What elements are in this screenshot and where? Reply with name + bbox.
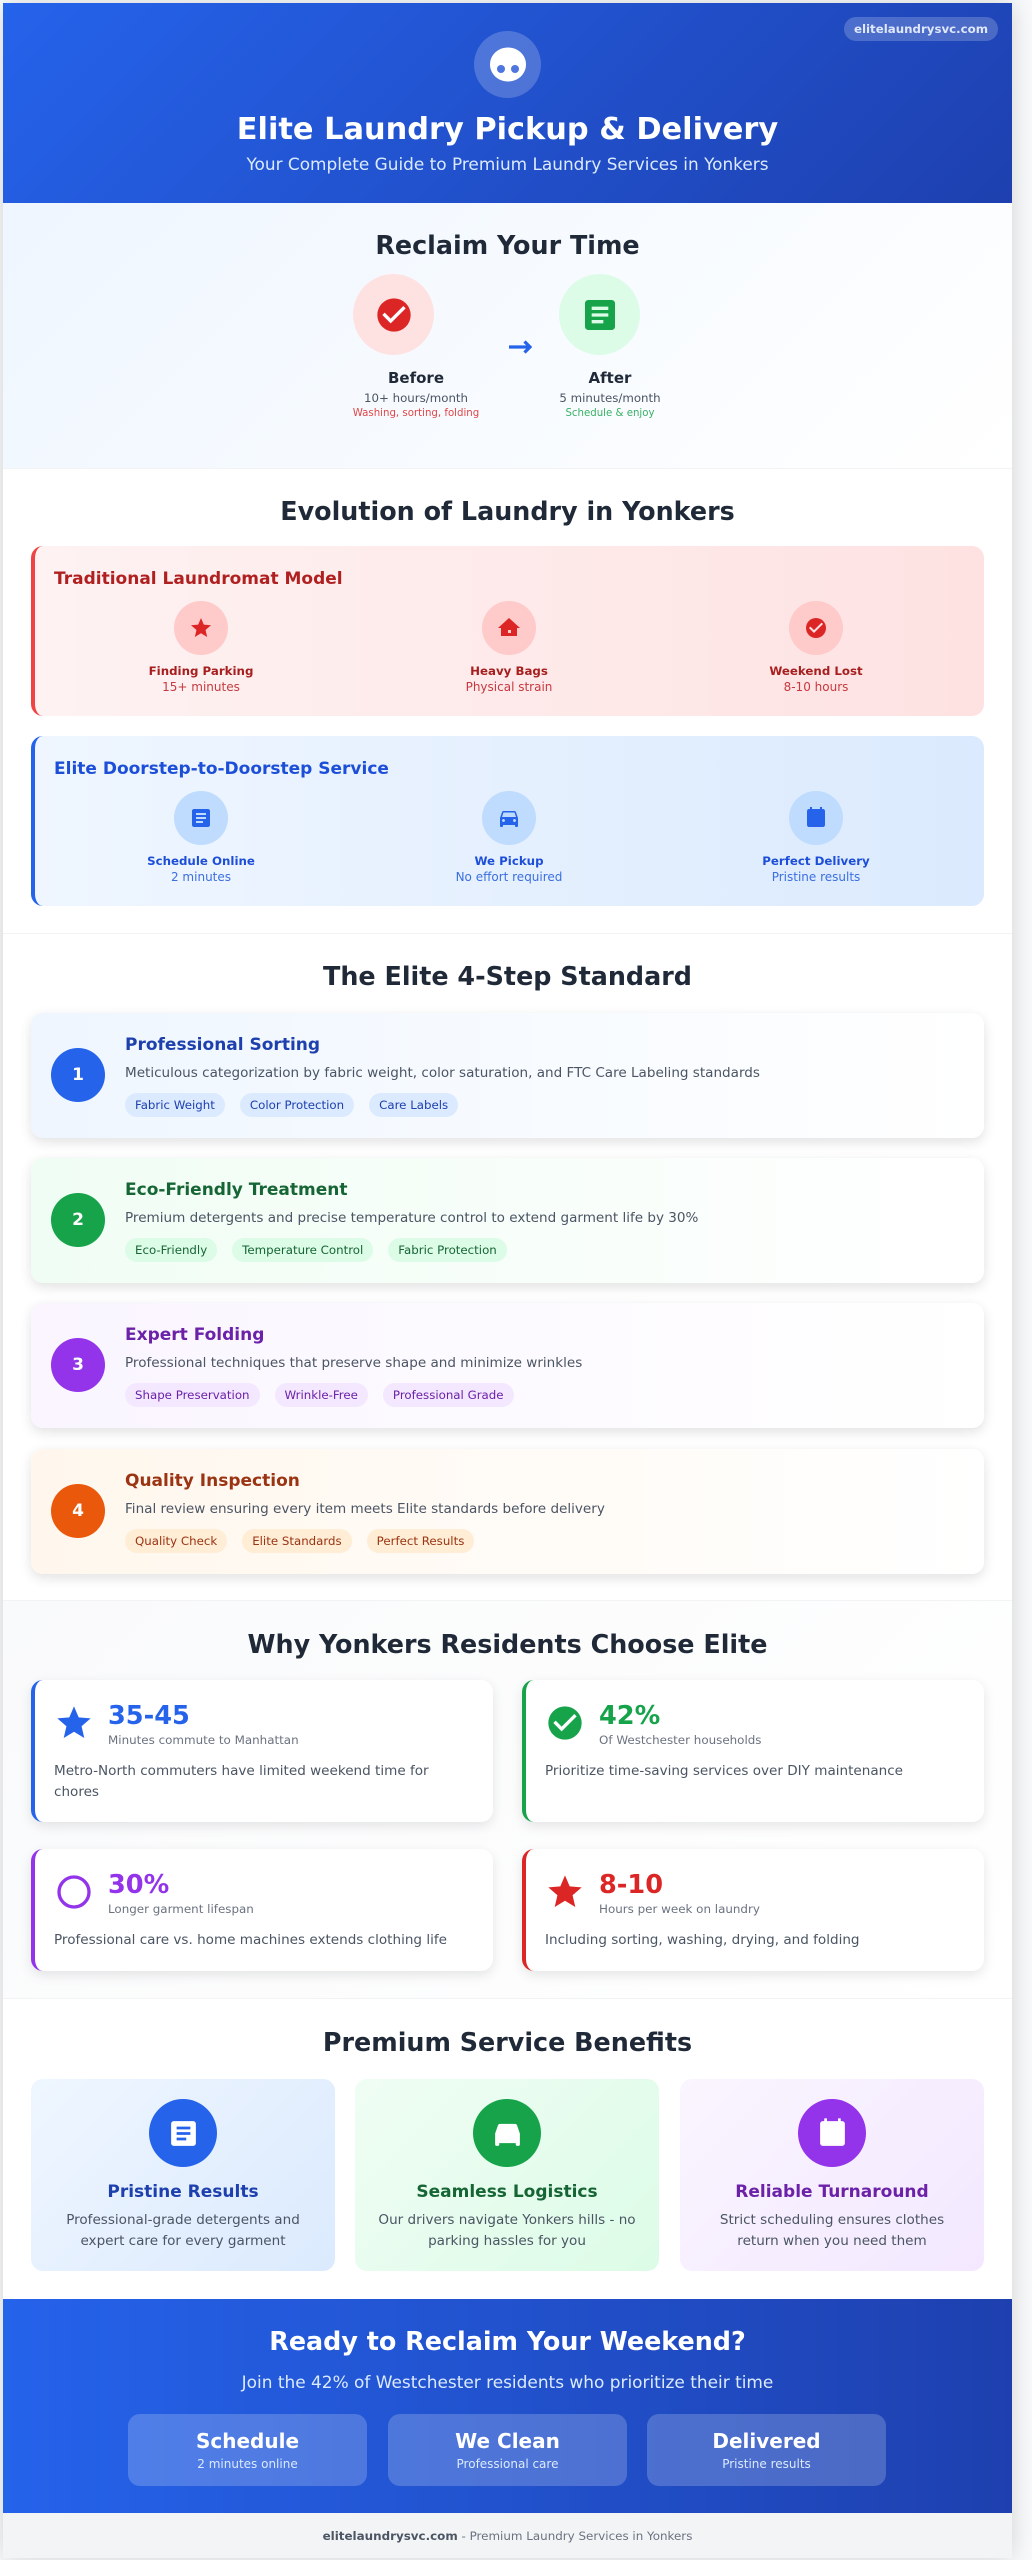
panel title: Elite Doorstep-to-Doorstep Service — [54, 759, 389, 779]
stat value: 42% — [599, 1701, 660, 1731]
step tags — [125, 1529, 474, 1553]
before text: 10+ hours/month — [364, 391, 468, 405]
step number — [51, 1193, 105, 1247]
item: heavy bags — [466, 601, 552, 694]
step number: 4 — [72, 1501, 84, 1521]
section heading: Reclaim Your Time — [375, 230, 640, 260]
stat value: 35-45 — [108, 1701, 190, 1731]
step tags: Quality Check — [135, 1534, 217, 1548]
cta box: delivered: Pristine results — [722, 2457, 811, 2471]
benefit card: reliable turnaround — [680, 2079, 984, 2271]
cta subtitle: Join the 42% of Westchester residents who prioritize their time — [242, 2372, 773, 2392]
step 2 card — [31, 1158, 984, 1283]
item: weekend lost — [769, 601, 863, 694]
cta box: schedule: Schedule — [196, 2429, 299, 2453]
item: finding parking — [149, 601, 253, 694]
step number — [51, 1048, 105, 1102]
footer — [3, 2513, 1012, 2558]
after text — [559, 369, 661, 419]
subtitle: Your Complete Guide to Premium Laundry Services in Yonkers — [246, 154, 768, 174]
stat card: households — [522, 1680, 984, 1822]
step 1 card — [31, 1013, 984, 1138]
step number: 3 — [72, 1355, 84, 1375]
before text: Washing, sorting, folding — [353, 408, 479, 419]
benefit description: Strict scheduling ensures clothes — [720, 2212, 944, 2228]
section: 4-step standard — [3, 933, 1012, 1600]
benefit card: pristine results — [31, 2079, 335, 2271]
item: perfect delivery: Perfect Delivery — [762, 854, 870, 868]
stat caption: Of Westchester households — [599, 1733, 762, 1747]
item: we pickup: We Pickup — [474, 854, 544, 868]
call to action banner — [3, 2299, 1012, 2513]
stat card: commute — [31, 1680, 493, 1822]
icon: before check — [353, 274, 434, 355]
stat value: 30% — [108, 1870, 169, 1900]
main title: Elite Laundry Pickup & Delivery — [237, 112, 778, 146]
icon: document — [149, 2099, 217, 2167]
step tags: Fabric Weight — [135, 1098, 215, 1112]
section: evolution of laundry — [3, 468, 1012, 933]
step tags: Care Labels — [379, 1098, 448, 1112]
website badge — [844, 17, 998, 41]
section: reclaim your time — [3, 203, 1012, 468]
benefit description: return when you need them — [737, 2232, 927, 2248]
item: weekend lost: 8-10 hours — [784, 680, 848, 694]
stat value: 8-10 — [599, 1870, 663, 1900]
step tags — [125, 1238, 507, 1262]
item: finding parking: 15+ minutes — [162, 680, 240, 694]
cta box: schedule — [128, 2414, 367, 2486]
benefit description: expert care for every garment — [80, 2232, 286, 2248]
item: heavy bags: Heavy Bags — [470, 664, 548, 678]
benefit description — [720, 2212, 944, 2248]
stat description — [54, 1763, 429, 1800]
benefit heading: Pristine Results — [107, 2182, 259, 2202]
item: weekend lost: Weekend Lost — [769, 664, 863, 678]
item: perfect delivery — [762, 791, 870, 884]
cta box: we clean: Professional care — [457, 2457, 558, 2471]
stat card: lifespan — [31, 1849, 493, 1971]
section heading: Evolution of Laundry in Yonkers — [280, 496, 735, 526]
step tags: Temperature Control — [242, 1243, 363, 1257]
stat description: Metro-North commuters have limited weekend time for — [54, 1763, 429, 1779]
section heading: Why Yonkers Residents Choose Elite — [248, 1629, 767, 1659]
item: perfect delivery: Pristine results — [772, 870, 860, 884]
stat description: chores — [54, 1784, 99, 1800]
panel: elite service — [31, 736, 984, 906]
benefit description: parking hassles for you — [428, 2232, 586, 2248]
item: schedule online — [147, 791, 255, 884]
step heading: Expert Folding — [125, 1325, 264, 1345]
footer text: elitelaundrysvc.com - Premium Laundry Services in Yonkers — [323, 2529, 692, 2543]
icon: after schedule — [559, 274, 640, 355]
section heading: Premium Service Benefits — [323, 2027, 692, 2057]
step description: Final review ensuring every item meets Elite standards before delivery — [125, 1500, 605, 1516]
after text: Schedule & enjoy — [565, 408, 655, 419]
benefit description: Our drivers navigate Yonkers hills - no — [378, 2212, 636, 2228]
stat description: Professional care vs. home machines extends clothing life — [54, 1932, 447, 1948]
item: schedule online: Schedule Online — [147, 854, 255, 868]
stat caption: Hours per week on laundry — [599, 1902, 760, 1916]
before text — [353, 369, 479, 419]
item: we pickup — [456, 791, 562, 884]
after text: After — [589, 369, 631, 387]
icon: calendar — [798, 2099, 866, 2167]
stat description: Including sorting, washing, drying, and folding — [545, 1932, 860, 1948]
section heading: The Elite 4-Step Standard — [323, 961, 692, 991]
stat card: hours — [522, 1849, 984, 1971]
after text: 5 minutes/month — [559, 391, 661, 405]
step tags: Professional Grade — [393, 1388, 504, 1402]
cta box: we clean: We Clean — [455, 2429, 560, 2453]
cta box: schedule: 2 minutes online — [197, 2457, 298, 2471]
stat caption: Longer garment lifespan — [108, 1902, 254, 1916]
item: we pickup: No effort required — [456, 870, 562, 884]
cta heading: Ready to Reclaim Your Weekend? — [269, 2326, 746, 2356]
step heading: Eco-Friendly Treatment — [125, 1180, 348, 1200]
icon: car — [473, 2099, 541, 2167]
step tags: Shape Preservation — [135, 1388, 250, 1402]
step tags — [125, 1093, 458, 1117]
cta box: delivered — [647, 2414, 886, 2486]
step tags: Eco-Friendly — [135, 1243, 207, 1257]
cta box: delivered: Delivered — [712, 2429, 821, 2453]
benefit card: seamless logistics — [355, 2079, 659, 2271]
before text: Before — [388, 369, 444, 387]
item: heavy bags: Physical strain — [466, 680, 552, 694]
benefit description — [66, 2212, 300, 2248]
step tags — [125, 1383, 514, 1407]
step number — [51, 1484, 105, 1538]
icon: star — [57, 1706, 91, 1738]
cta box: we clean — [388, 2414, 627, 2486]
header banner — [3, 3, 1012, 203]
panel: traditional model — [31, 546, 984, 716]
step tags: Wrinkle-Free — [285, 1388, 358, 1402]
step number: 2 — [72, 1210, 84, 1230]
step tags: Perfect Results — [377, 1534, 464, 1548]
benefit description: Professional-grade detergents and — [66, 2212, 300, 2228]
stat description: Prioritize time-saving services over DIY maintenance — [545, 1763, 903, 1779]
step tags: Color Protection — [250, 1098, 344, 1112]
step description: Premium detergents and precise temperature control to extend garment life by 30% — [125, 1210, 698, 1226]
section: why yonkers residents choose elite — [3, 1600, 1012, 1998]
icon: star — [548, 1876, 582, 1907]
benefit heading: Reliable Turnaround — [735, 2182, 929, 2202]
step heading: Quality Inspection — [125, 1471, 300, 1491]
step 3 card — [31, 1303, 984, 1428]
arrow — [509, 340, 532, 354]
icon: laundry logo — [474, 31, 541, 98]
section: premium service benefits — [3, 1998, 1012, 2299]
step tags: Elite Standards — [252, 1534, 342, 1548]
step number: 1 — [72, 1065, 84, 1085]
step 4 card — [31, 1449, 984, 1574]
item: finding parking: Finding Parking — [149, 664, 253, 678]
stat caption: Minutes commute to Manhattan — [108, 1733, 299, 1747]
step tags: Fabric Protection — [398, 1243, 497, 1257]
item: schedule online: 2 minutes — [171, 870, 231, 884]
benefit heading: Seamless Logistics — [416, 2182, 598, 2202]
website badge: elitelaundrysvc.com — [854, 22, 988, 36]
benefit description — [378, 2212, 636, 2248]
step heading: Professional Sorting — [125, 1035, 320, 1055]
step number — [51, 1338, 105, 1392]
icon: ring — [57, 1875, 91, 1909]
step description: Meticulous categorization by fabric weight, color saturation, and FTC Care Labeling standards — [125, 1064, 760, 1080]
icon: check circle — [548, 1706, 582, 1740]
panel title: Traditional Laundromat Model — [54, 569, 343, 589]
step description: Professional techniques that preserve shape and minimize wrinkles — [125, 1354, 582, 1370]
